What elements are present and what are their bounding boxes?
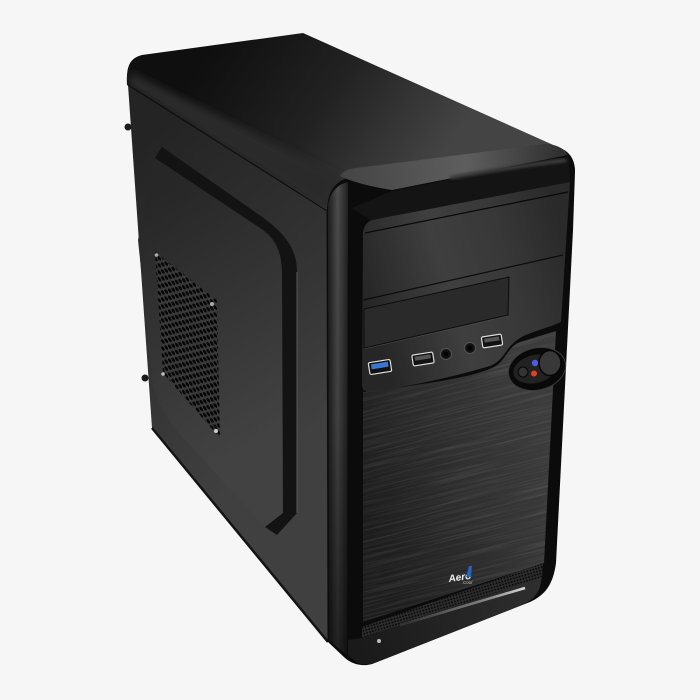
microphone jack <box>464 342 476 354</box>
case top panel <box>127 33 575 214</box>
red LED <box>531 370 537 376</box>
top rounded edge band <box>126 72 296 178</box>
blue LED <box>532 360 538 366</box>
side panel <box>128 85 328 642</box>
headphone jack <box>440 348 452 360</box>
USB 2.0 port left <box>412 352 434 366</box>
front glossy lip <box>352 156 570 221</box>
lower bay divider line <box>363 255 563 300</box>
USB 3.0 port <box>368 359 392 375</box>
brand logo: Aero <box>447 571 472 585</box>
front frame <box>327 144 575 665</box>
front top bevel <box>340 144 568 190</box>
bottom lip and silver light strip <box>348 577 542 664</box>
drive bay panel <box>362 182 570 392</box>
side recess groove <box>155 147 297 535</box>
rear screws <box>124 124 148 382</box>
reset button <box>518 367 528 377</box>
brand logo: Cool <box>463 580 473 585</box>
slim drive bay cover <box>364 277 509 348</box>
side ventilation mesh <box>155 252 220 438</box>
bottom mesh vent strip <box>362 563 543 638</box>
USB 2.0 port right <box>481 334 503 348</box>
upper bay cover line <box>365 192 568 233</box>
front left light strip <box>328 182 348 655</box>
power button cluster <box>504 342 570 396</box>
brushed front panel <box>363 331 556 622</box>
illustration: black mini tower PC case <box>124 33 575 666</box>
power button <box>539 350 561 376</box>
brand logo <box>447 566 473 585</box>
side recessed inner panel <box>138 158 283 527</box>
